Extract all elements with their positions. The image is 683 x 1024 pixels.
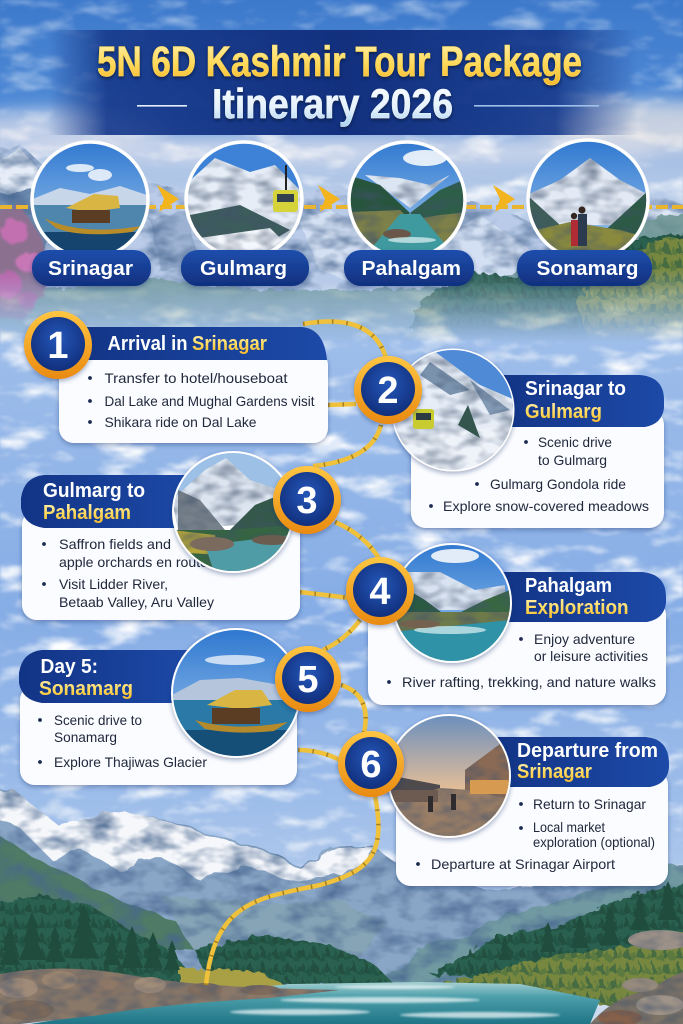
- badge 2: [354, 356, 422, 424]
- day 2 bullets: Scenic drive: [538, 434, 612, 450]
- background: lower mountains, forest and river: [0, 790, 683, 1024]
- panel: day 4 Pahalgam exploration: [346, 543, 666, 705]
- photo: couple overlooking peaks: [530, 142, 646, 250]
- day 6 header: [495, 737, 669, 787]
- day 2 bullets: Gulmarg Gondola ride: [490, 476, 626, 492]
- day 2 header: Srinagar to: [525, 378, 626, 400]
- day 5 photo: shikara on lake: [171, 628, 302, 760]
- day 2 header: Gulmarg: [525, 401, 602, 423]
- destination: Pahalgam: [344, 140, 474, 286]
- arrow 1: [157, 185, 179, 212]
- day 6 header: Departure from: [517, 740, 658, 762]
- day 3 header: [21, 475, 200, 528]
- label pill: Srinagar: Srinagar: [48, 258, 133, 280]
- day 1 bullets: Dal Lake and Mughal Gardens visit: [104, 393, 315, 409]
- day 4 bullets: [387, 631, 656, 690]
- day 2 photo: gondola on snowy slope: [390, 348, 515, 475]
- destination: Sonamarg: [517, 140, 652, 286]
- day 3 photo: Lidder River valley: [172, 450, 294, 575]
- day 5 bullets: Scenic drive to: [54, 712, 142, 728]
- badge 3: 3: [296, 480, 318, 522]
- badge 3: [273, 466, 341, 534]
- badge 1: 1: [47, 325, 69, 367]
- badge 4: [346, 557, 414, 625]
- label pill: Pahalgam: Pahalgam: [362, 258, 461, 280]
- badge 5: [275, 646, 341, 712]
- day 1 bullets: Transfer to hotel/houseboat: [104, 370, 288, 386]
- destination: Gulmarg: [181, 140, 309, 286]
- day 6 photo: market street at dusk: [387, 714, 512, 840]
- day 5 bullets: [38, 712, 207, 770]
- title line 1: 5N 6D Kashmir Tour Package: [97, 38, 582, 86]
- label pill: Srinagar: [32, 250, 151, 286]
- photo: snow mountain and gondola: [188, 144, 300, 250]
- route dashed line: [0, 205, 683, 209]
- label pill: Sonamarg: Sonamarg: [536, 258, 638, 280]
- label pill: Sonamarg: [517, 250, 652, 286]
- day 6 bullets: Local market: [533, 819, 605, 835]
- label pill: Gulmarg: [181, 250, 309, 286]
- day 1 bullets: [88, 370, 315, 430]
- day 3 header: Gulmarg to: [43, 480, 145, 502]
- day 2 bullets: to Gulmarg: [538, 452, 607, 468]
- day 6 bullets: Departure at Srinagar Airport: [431, 856, 615, 872]
- day 2 bullets: [429, 434, 649, 514]
- day 1 bullets: Shikara ride on Dal Lake: [104, 414, 257, 430]
- panel: day 5 Sonamarg: [19, 628, 341, 785]
- label pill: Gulmarg: Gulmarg: [200, 258, 287, 280]
- destination: Srinagar: [30, 140, 151, 286]
- arrow 3: [493, 185, 515, 212]
- day 2 header: [500, 375, 664, 427]
- label pill: Pahalgam: [344, 250, 474, 286]
- title line 2: Itinerary 2026: [212, 80, 453, 127]
- day 4 bullets: or leisure activities: [534, 648, 648, 664]
- day 4 header: [500, 572, 666, 622]
- day 5 header: Sonamarg: [39, 678, 133, 700]
- panel: day 3 Gulmarg to Pahalgam: [21, 450, 341, 620]
- day 3 bullets: Visit Lidder River,: [59, 576, 168, 592]
- photo: shikara on lake: [34, 144, 146, 250]
- day 3 bullets: [42, 536, 214, 610]
- day 3 bullets: Saffron fields and: [59, 536, 171, 552]
- day 1 header: Srinagar: [192, 333, 267, 355]
- route path connecting the days: [206, 322, 386, 985]
- day 4 header: Exploration: [525, 597, 628, 619]
- badge 1: [24, 311, 92, 379]
- day 5 bullets: Sonamarg: [54, 729, 117, 745]
- day 1 header: Arrival in: [108, 333, 188, 355]
- day 4 bullets: River rafting, trekking, and nature walks: [402, 674, 656, 690]
- day 6 bullets: [416, 796, 655, 872]
- day 6 bullets: exploration (optional): [533, 834, 655, 850]
- title band: [48, 30, 638, 135]
- day 2 bullets: Explore snow-covered meadows: [443, 498, 649, 514]
- day 6 header: Srinagar: [517, 761, 592, 783]
- badge 2: 2: [377, 370, 399, 412]
- badge 5: 5: [297, 659, 319, 701]
- day 3 header: Pahalgam: [43, 502, 131, 524]
- background: upper mountains and forest: [0, 144, 683, 339]
- day 5 bullets: Explore Thajiwas Glacier: [54, 754, 207, 770]
- day 4 photo: Pahalgam river: [392, 543, 512, 665]
- panel: day 2 Srinagar to Gulmarg: [354, 348, 664, 528]
- day 1 header: [70, 327, 327, 360]
- day 5 header: Day 5:: [40, 656, 98, 678]
- badge 6: 6: [360, 744, 382, 786]
- day 4 header: Pahalgam: [525, 575, 612, 597]
- day 3 bullets: Betaab Valley, Aru Valley: [59, 594, 214, 610]
- panel: day 1 arrival in Srinagar: [24, 311, 328, 443]
- badge 6: [338, 731, 404, 797]
- day 4 bullets: Enjoy adventure: [534, 631, 635, 647]
- day 3 bullets: apple orchards en route: [59, 554, 208, 570]
- panel: day 6 departure from Srinagar: [338, 714, 669, 886]
- photo: river valley: [350, 144, 464, 250]
- arrow 2: [318, 185, 340, 212]
- day 6 bullets: Return to Srinagar: [533, 796, 646, 812]
- day 5 header: [19, 650, 200, 703]
- badge 4: 4: [369, 571, 391, 613]
